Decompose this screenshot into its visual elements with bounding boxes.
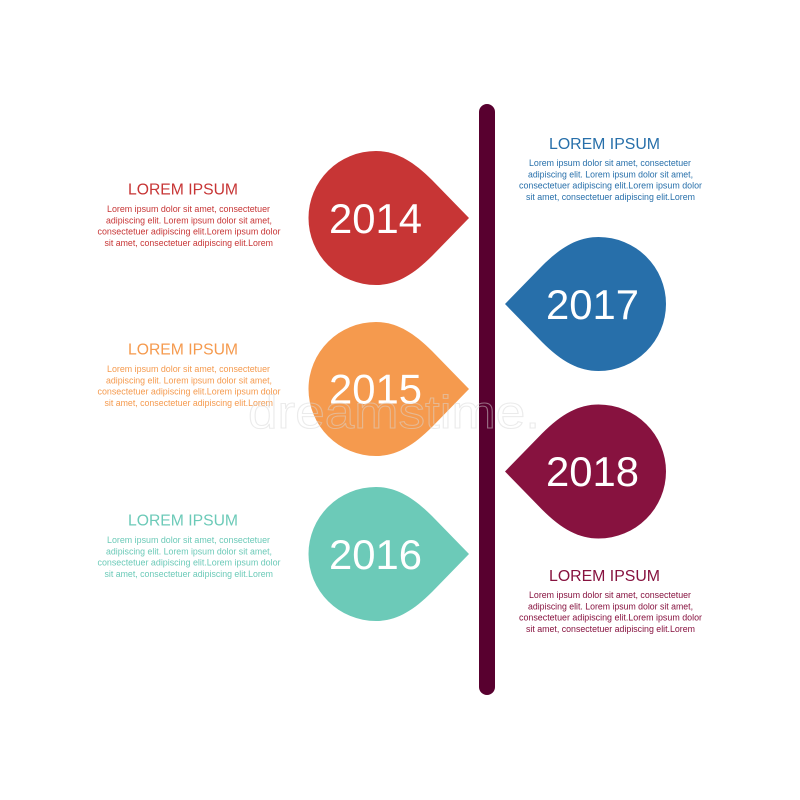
watermark: dreamstime.	[248, 386, 540, 438]
year 2014: 2014	[329, 195, 422, 242]
body text 2015: sit amet, consectetuer adipiscing elit.Lorem	[104, 398, 273, 408]
drop marker 2015	[308, 322, 469, 456]
body text 2016: Lorem ipsum dolor sit amet, consectetuer	[107, 535, 270, 545]
body text 2016	[98, 535, 281, 579]
body text 2017: Lorem ipsum dolor sit amet, consectetuer	[529, 158, 691, 168]
body text 2015: consectetuer adipiscing elit.Lorem ipsum dolor	[98, 387, 281, 397]
body text 2014: adipiscing elit. Lorem ipsum dolor sit amet,	[106, 215, 272, 225]
body text 2017: consectetuer adipiscing elit.Lorem ipsum dolor	[519, 181, 702, 191]
body text 2015: adipiscing elit. Lorem ipsum dolor sit amet,	[106, 375, 272, 385]
milestone 2018	[505, 404, 702, 634]
heading 2014: LOREM IPSUM	[128, 182, 238, 198]
body text 2018: sit amet, consectetuer adipiscing elit.Lorem	[526, 624, 695, 634]
body text 2017: adipiscing elit. Lorem ipsum dolor sit amet,	[528, 169, 693, 179]
body text 2016: consectetuer adipiscing elit.Lorem ipsum dolor	[98, 558, 281, 568]
body text 2015	[98, 364, 281, 408]
milestone 2017	[505, 136, 702, 371]
body text 2017	[519, 158, 702, 202]
year 2018: 2018	[546, 448, 639, 495]
body text 2018: adipiscing elit. Lorem ipsum dolor sit amet,	[528, 601, 693, 611]
body text 2014: consectetuer adipiscing elit.Lorem ipsum dolor	[98, 227, 281, 237]
year 2015: 2015	[329, 366, 422, 412]
heading 2017: LOREM IPSUM	[549, 136, 660, 153]
heading 2018: LOREM IPSUM	[549, 568, 660, 585]
body text 2016: sit amet, consectetuer adipiscing elit.Lorem	[104, 569, 273, 579]
heading 2015: LOREM IPSUM	[128, 342, 238, 358]
drop marker 2018	[505, 404, 666, 538]
milestone 2014	[98, 151, 469, 285]
body text 2015: Lorem ipsum dolor sit amet, consectetuer	[107, 364, 270, 374]
body text 2014: sit amet, consectetuer adipiscing elit.Lorem	[104, 238, 273, 248]
body text 2014	[98, 204, 281, 248]
year 2017: 2017	[546, 281, 639, 328]
body text 2017: sit amet, consectetuer adipiscing elit.Lorem	[526, 192, 695, 202]
body text 2018	[519, 590, 702, 634]
milestone 2015	[98, 322, 469, 456]
body text 2016: adipiscing elit. Lorem ipsum dolor sit amet,	[106, 546, 272, 556]
drop marker 2016	[308, 487, 469, 621]
body text 2018: Lorem ipsum dolor sit amet, consectetuer	[529, 590, 691, 600]
milestone 2016	[98, 487, 469, 621]
year 2016: 2016	[329, 531, 422, 578]
body text 2014: Lorem ipsum dolor sit amet, consectetuer	[107, 204, 270, 214]
body text 2018: consectetuer adipiscing elit.Lorem ipsum dolor	[519, 613, 702, 623]
timeline vertical bar	[479, 104, 495, 695]
drop marker 2014	[308, 151, 469, 285]
heading 2016: LOREM IPSUM	[128, 512, 238, 530]
drop marker 2017	[505, 237, 666, 371]
